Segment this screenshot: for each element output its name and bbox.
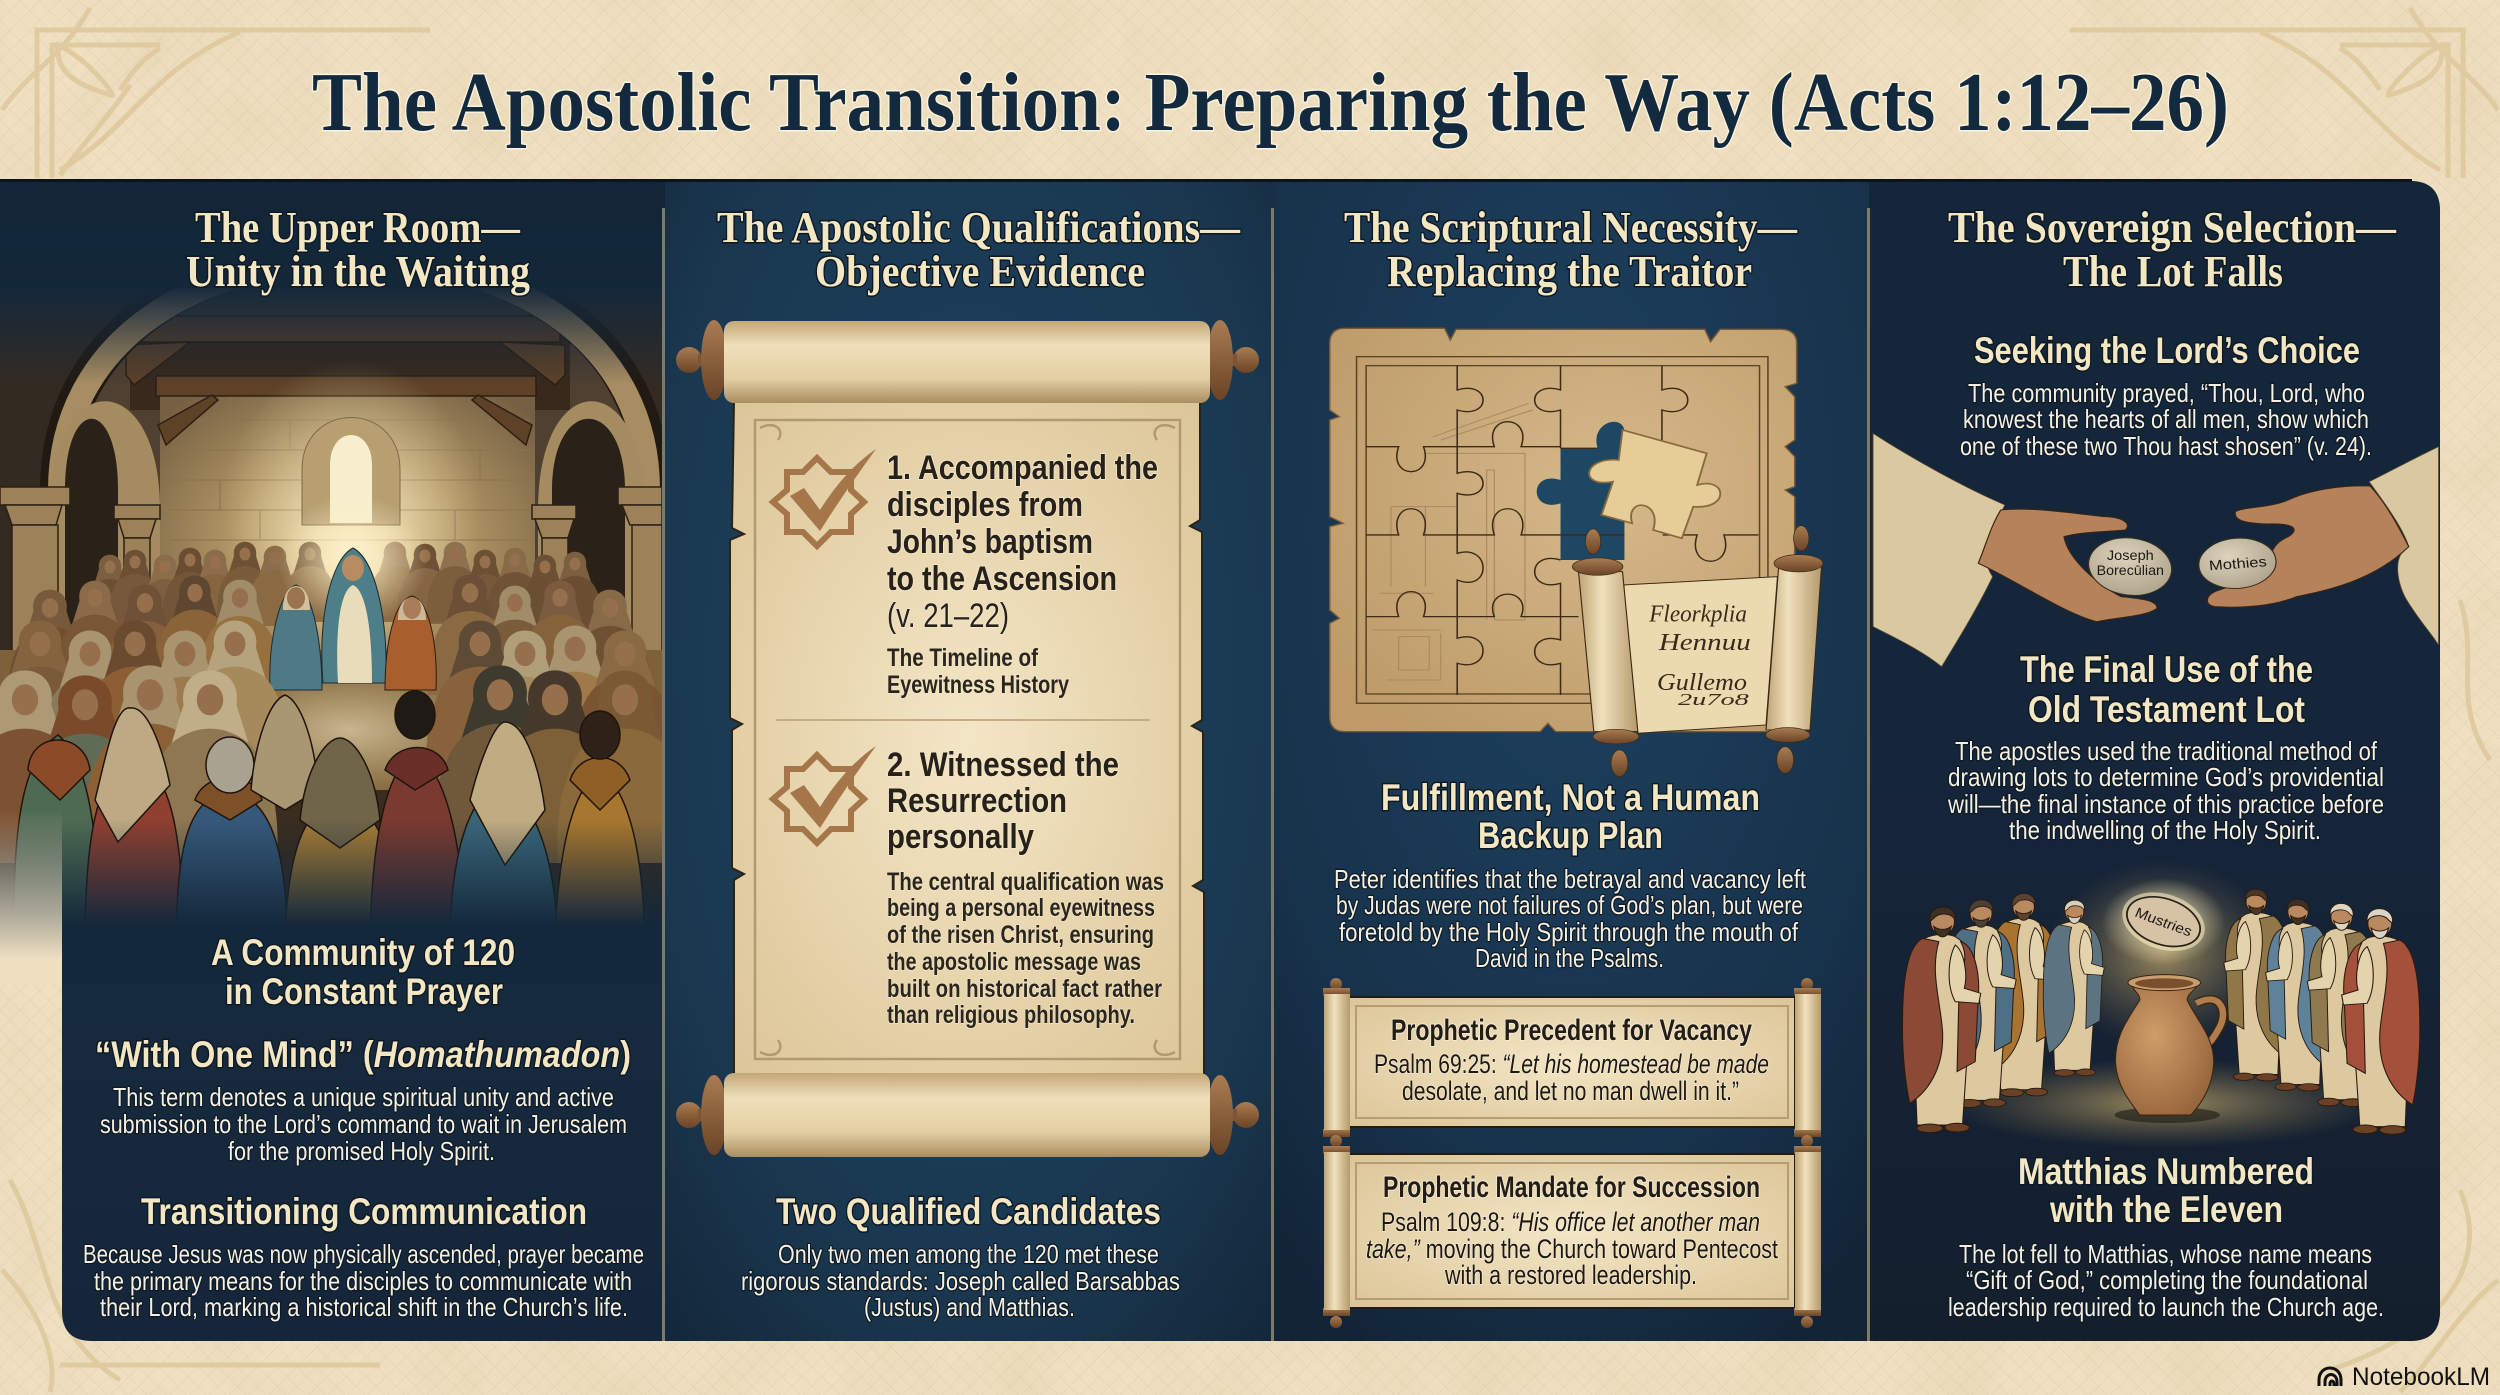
- matthias heading: [2018, 1151, 2314, 1230]
- transitioning text: the primary means for the disciples to communicate with: [94, 1266, 632, 1296]
- illustration: puzzle and scroll: [1330, 328, 1823, 777]
- qualification 2 note: of the risen Christ, ensuring: [887, 921, 1154, 949]
- column 4 heading: [1948, 203, 2397, 296]
- qualification 2: [887, 746, 1119, 856]
- qualification 2: Resurrection: [887, 782, 1067, 820]
- side arches: [57, 401, 636, 626]
- matthias text: leadership required to launch the Church age.: [1948, 1292, 2384, 1322]
- prophecy 1 text: Prophetic Precedent for Vacancy: [1391, 1014, 1752, 1047]
- crowd middle rows: [0, 621, 693, 868]
- final use text: will—the final instance of this practice before: [1947, 789, 2384, 819]
- qualification 2 note: being a personal eyewitness: [887, 894, 1155, 922]
- glowing stone: Mustries: [2132, 905, 2194, 940]
- one mind text: for the promised Holy Spirit.: [228, 1136, 495, 1166]
- icon: check 2: [773, 746, 876, 843]
- fulfillment text: by Judas were not failures of God’s plan, but were: [1336, 890, 1803, 920]
- one mind text: This term denotes a unique spiritual unity and active: [113, 1082, 614, 1112]
- fulfillment text: foretold by the Holy Spirit through the mouth of: [1339, 917, 1799, 947]
- fulfillment heading: Fulfillment, Not a Human: [1381, 777, 1760, 818]
- panel: scriptural necessity column: [1323, 203, 1823, 1328]
- matthias text: [1948, 1239, 2384, 1322]
- fulfillment text: David in the Psalms.: [1475, 943, 1664, 973]
- handwriting: [1648, 600, 1751, 709]
- final use heading: Old Testament Lot: [2028, 689, 2305, 730]
- left hand: [1978, 509, 2157, 622]
- column 1 heading: Unity in the Waiting: [186, 247, 530, 296]
- puzzle seams: [1366, 366, 1758, 695]
- prophecy 2 text: Prophetic Mandate for Succession: [1383, 1171, 1760, 1204]
- qualification 2: 2. Witnessed the: [887, 746, 1119, 784]
- qualification 2: personally: [887, 818, 1034, 856]
- title: The Apostolic Transition: Preparing the Way (Acts 1:12–26): [312, 56, 2229, 149]
- final use text: [1947, 736, 2384, 845]
- stone: Matthias: [2195, 534, 2280, 592]
- qualification 1: disciples from: [887, 486, 1083, 524]
- column 1 heading: [186, 203, 530, 296]
- stone: Matthias: Mothies: [2208, 555, 2268, 574]
- seeking heading: Seeking the Lord’s Choice: [1974, 330, 2360, 371]
- right sleeve: [2369, 447, 2439, 645]
- transitioning text: their Lord, marking a historical shift in the Church’s life.: [100, 1292, 628, 1322]
- candidates text: rigorous standards: Joseph called Barsabbas: [741, 1266, 1180, 1296]
- qualification 1: (v. 21–22): [887, 597, 1009, 635]
- transitioning text: Because Jesus was now physically ascended, prayer became: [83, 1239, 644, 1269]
- candidates text: (Justus) and Matthias.: [864, 1292, 1075, 1322]
- column 3 heading: [1344, 203, 1798, 296]
- column 2 heading: [717, 203, 1241, 296]
- qualification 2 note: built on historical fact rather: [887, 975, 1162, 1003]
- open scroll: [1572, 526, 1823, 777]
- stone: Joseph: [2081, 530, 2180, 603]
- prophecy 1 text: [1374, 1014, 1769, 1106]
- crowd foreground figures: [14, 690, 643, 917]
- puzzle board: [1330, 328, 1797, 732]
- notebooklm logo: NotebookLM: [2352, 1363, 2490, 1391]
- column 1 heading: The Upper Room—: [195, 203, 521, 252]
- one mind text: [100, 1082, 627, 1166]
- column 3 heading: The Scriptural Necessity—: [1344, 203, 1798, 252]
- handwriting: Hennuu: [1658, 629, 1751, 656]
- qualification 1 note: Eyewitness History: [887, 671, 1069, 699]
- scroll sheet: [730, 400, 1204, 1076]
- community heading: [211, 932, 515, 1012]
- loose puzzle piece: [1589, 430, 1720, 538]
- one mind heading: “With One Mind” (Homathumadon): [95, 1034, 631, 1075]
- illustration: casting lots: [1902, 860, 2420, 1148]
- seeking text: [1960, 378, 2372, 461]
- prophecy scroll 2: [1323, 1135, 1821, 1328]
- prophecy 2 text: [1366, 1171, 1778, 1290]
- room masonry: [0, 298, 662, 650]
- community heading: A Community of 120: [211, 932, 515, 973]
- icon: check 1: [773, 449, 876, 546]
- corner ornament: top left: [2, 8, 430, 178]
- final use text: The apostles used the traditional method of: [1955, 736, 2378, 766]
- column 4 heading: The Sovereign Selection—: [1948, 203, 2397, 252]
- seeking text: one of these two Thou hast shosen” (v. 24).: [1960, 431, 2372, 461]
- handwriting: Gullemo: [1657, 669, 1747, 696]
- fulfillment text: Peter identifies that the betrayal and vacancy left: [1334, 864, 1807, 894]
- frame lines: [1357, 357, 1768, 703]
- community heading: in Constant Prayer: [225, 971, 503, 1012]
- prophecy 2 text: with a restored leadership.: [1444, 1260, 1697, 1290]
- right hand: [2207, 486, 2409, 607]
- window light: [234, 370, 467, 636]
- temple sketch: [1372, 403, 1533, 680]
- clay jar: [2114, 975, 2223, 1123]
- prophecy 1 text: Psalm 69:25: “Let his homestead be made: [1374, 1049, 1769, 1079]
- transitioning heading: Transitioning Communication: [141, 1191, 587, 1232]
- transitioning text: [83, 1239, 644, 1322]
- crowd back rows: [8, 542, 652, 710]
- final use text: drawing lots to determine God’s providential: [1948, 762, 2384, 792]
- final use heading: [2020, 649, 2313, 730]
- prophecy 2 text: Psalm 109:8: “His office let another man: [1381, 1207, 1760, 1237]
- stone: Joseph: Borecūlian: [2097, 563, 2164, 579]
- final use heading: The Final Use of the: [2020, 649, 2313, 690]
- stone: Joseph: Joseph: [2107, 548, 2154, 564]
- illustration: upper room scene: [0, 254, 693, 989]
- left sleeve: [1873, 433, 2005, 667]
- panel: apostolic qualifications column: [676, 203, 1259, 1322]
- main arch: [40, 292, 662, 486]
- top and bottom fades: [0, 285, 662, 989]
- handwriting: 2u7o8: [1678, 690, 1749, 709]
- qualification 2 note: [887, 868, 1164, 1029]
- candidates heading: Two Qualified Candidates: [776, 1191, 1161, 1232]
- fulfillment heading: [1381, 777, 1760, 856]
- top roller: [676, 320, 1259, 403]
- qualification 2 note: than religious philosophy.: [887, 1001, 1135, 1029]
- scroll inner border: [755, 420, 1180, 1059]
- qualification 1: [887, 449, 1158, 635]
- matthias text: “Gift of God,” completing the foundational: [1966, 1265, 2368, 1295]
- floor: [0, 650, 662, 790]
- wooden beams: [126, 316, 565, 445]
- fulfillment heading: Backup Plan: [1478, 815, 1663, 856]
- seeking text: The community prayed, “Thou, Lord, who: [1968, 378, 2365, 408]
- prophecy 1 text: desolate, and let no man dwell in it.”: [1402, 1076, 1739, 1106]
- illustration: hands and stones: [1873, 433, 2439, 667]
- prophecy 2 text: take,” moving the Church toward Pentecost: [1366, 1234, 1778, 1264]
- apostles right: [2224, 889, 2420, 1134]
- column 4 heading: The Lot Falls: [2063, 247, 2283, 296]
- seeking text: knowest the hearts of all men, show which: [1963, 404, 2369, 434]
- large parchment scroll: [676, 320, 1259, 1157]
- column 3 heading: Replacing the Traitor: [1387, 247, 1752, 296]
- final use text: the indwelling of the Holy Spirit.: [2009, 815, 2321, 845]
- matthias heading: with the Eleven: [2049, 1189, 2283, 1230]
- fulfillment text: [1334, 864, 1807, 973]
- matthias heading: Matthias Numbered: [2018, 1151, 2314, 1192]
- one mind text: submission to the Lord’s command to wait in Jerusalem: [100, 1109, 627, 1139]
- matthias text: The lot fell to Matthias, whose name means: [1959, 1239, 2372, 1269]
- candidates text: [741, 1239, 1180, 1322]
- glowing stone: [2113, 882, 2214, 962]
- corner ornament: bottom right: [2330, 600, 2498, 1392]
- column 2 heading: Objective Evidence: [815, 247, 1145, 296]
- prophecy scroll 1: [1323, 978, 1821, 1137]
- panel: sovereign selection column: [1873, 203, 2439, 1322]
- missing piece hole: [1537, 422, 1624, 560]
- qualification 1 note: The Timeline of: [887, 644, 1039, 672]
- corner ornament: bottom left: [2, 1180, 380, 1392]
- column 2 heading: The Apostolic Qualifications—: [717, 203, 1241, 252]
- candidates text: Only two men among the 120 met these: [778, 1239, 1159, 1269]
- glow and floor: [1945, 860, 2382, 1148]
- qualification 1 note: [887, 644, 1069, 699]
- qualification 2 note: The central qualification was: [887, 868, 1164, 896]
- qualification 2 note: the apostolic message was: [887, 948, 1141, 976]
- central praying figures: [270, 495, 436, 690]
- icon: logo arcs: [2319, 1368, 2341, 1386]
- panel: upper room column: [0, 203, 693, 1322]
- pillars: [0, 486, 662, 650]
- qualification 1: John’s baptism: [887, 523, 1093, 561]
- qualification 1: to the Ascension: [887, 560, 1117, 598]
- bottom roller: [676, 1073, 1259, 1157]
- handwriting: Fleorkplia: [1648, 600, 1747, 627]
- corner ornament: top right: [2070, 8, 2498, 178]
- qualification 1: 1. Accompanied the: [887, 449, 1158, 487]
- apostles left: [1902, 893, 2104, 1133]
